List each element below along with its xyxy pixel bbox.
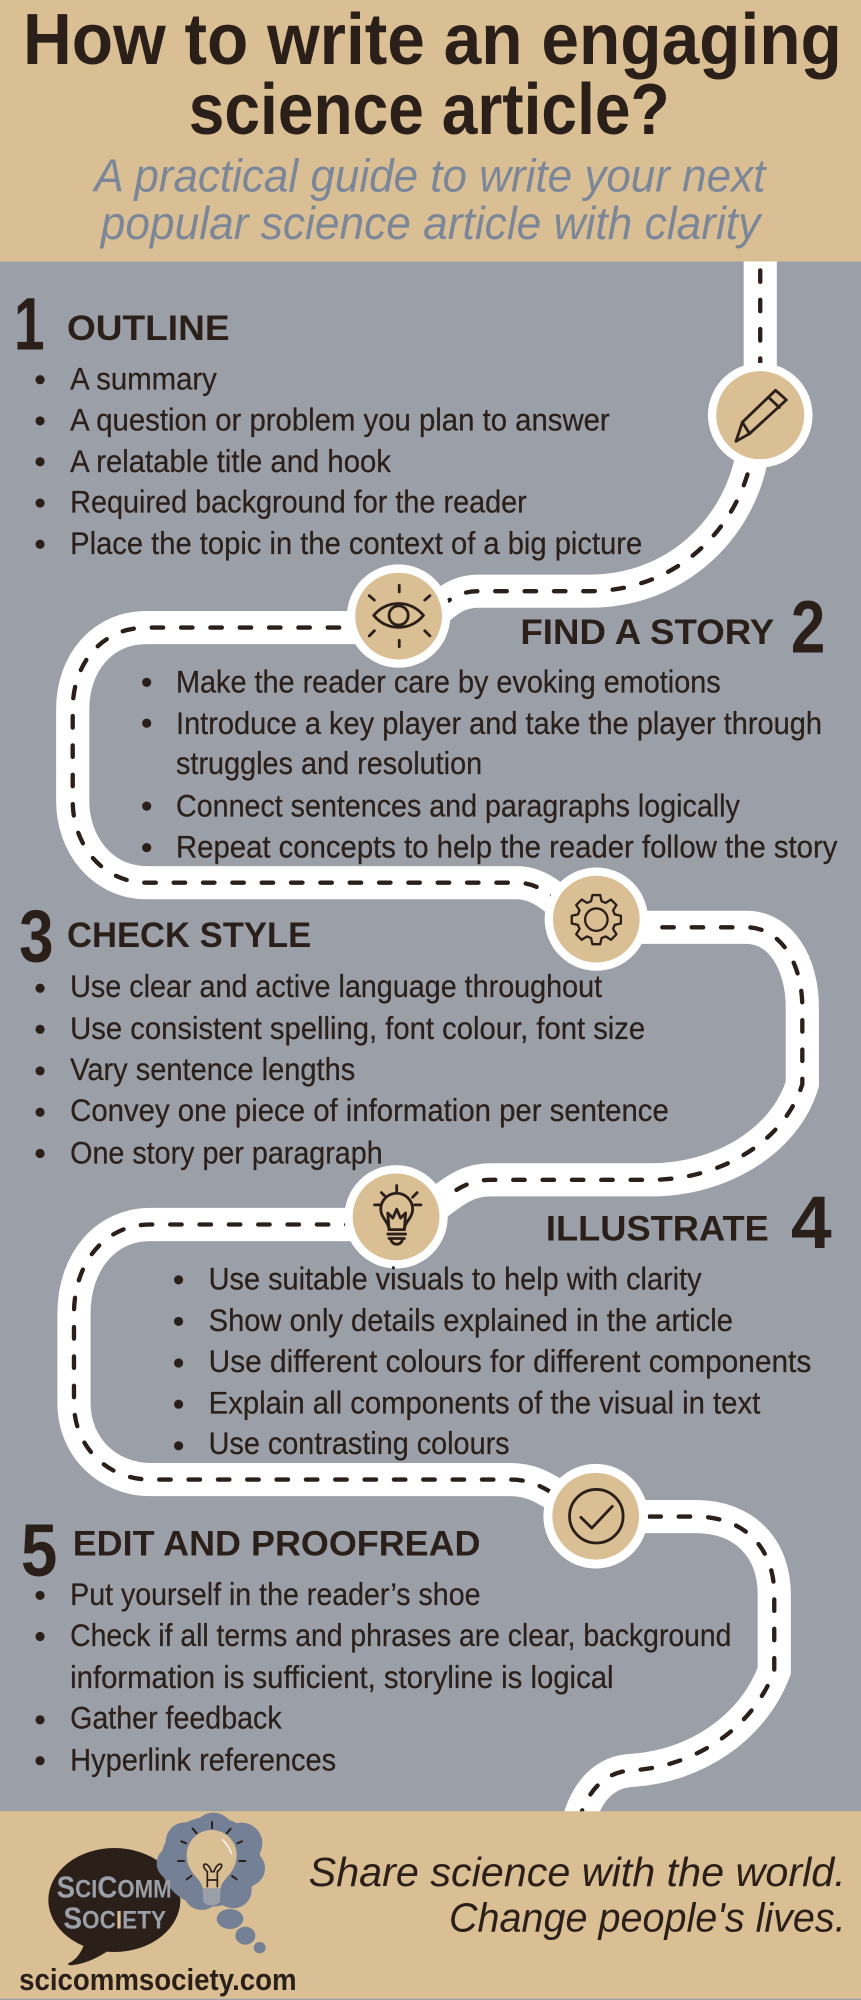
bullet list: outline: A relatable title and hook [70,443,391,479]
bullet list: check style: Convey one piece of information per sentence [70,1092,669,1128]
road with dashed centre line [73,255,802,1824]
bullet list: check style: One story per paragraph [70,1134,383,1170]
subtitle: A practical guide to write your next [92,149,767,201]
bullet list: find a story: Connect sentences and paragraphs logically [176,787,740,823]
bullet list: illustrate [174,1261,811,1461]
title [23,0,842,150]
step number 3: 3 [19,894,54,977]
step number 2: 2 [791,586,825,669]
bullet list: edit and proofread: Gather feedback [70,1700,282,1736]
step number 1: 1 [14,282,45,365]
icon: check mark [570,1489,623,1543]
bullet list: find a story: Make the reader care by evoking emotions [176,663,721,699]
icon: light bulb [375,1186,421,1244]
logo: wordmark: SOCIETY [63,1901,167,1935]
bullet list: edit and proofread: information is sufficient, storyline is logical [70,1659,614,1695]
bullet list: edit and proofread: Put yourself in the reader’s shoe [70,1576,481,1612]
footer panel [0,1811,861,1999]
bullet list: check style: Vary sentence lengths [70,1051,355,1087]
bullet list: illustrate: Explain all components of the visual in text [209,1384,760,1420]
node: gear [545,867,648,971]
icon: pencil [736,390,786,441]
step number 5: 5 [21,1509,57,1592]
bullet list: find a story [142,663,837,865]
logo: light bulb [178,1822,245,1905]
tagline: Share science with the world. [309,1849,846,1895]
panel: step 3 check style [19,894,669,1170]
logo: thought cloud [157,1813,266,1953]
heading: edit and proofread: EDIT AND PROOFREAD [73,1524,481,1563]
heading: find a story: FIND A STORY [520,613,774,652]
bullet list: outline: A question or problem you plan to answer [70,401,610,437]
step number 4: 4 [791,1181,832,1264]
panel: step 5 edit and proofread [21,1509,731,1777]
heading: outline: OUTLINE [67,309,230,348]
node: light bulb [344,1165,448,1268]
node: pencil [708,363,813,467]
tagline: Change people's lives. [449,1895,846,1941]
website address: scicommsociety.com [19,1963,297,1997]
subtitle: popular science article with clarity [99,197,763,249]
tagline [309,1849,846,1941]
panel: step 2 find a story [142,586,837,865]
bullet list: illustrate: Use suitable visuals to help with clarity [209,1261,702,1297]
logo: speech bubble [48,1848,180,1965]
title: science article? [189,69,670,150]
bullet list: outline: A summary [70,361,217,397]
bullet list: check style: Use clear and active language throughout [70,968,602,1004]
subtitle [92,149,767,249]
icon: gear [572,895,621,944]
bullet list: edit and proofread: Check if all terms and phrases are clear, background [70,1617,731,1653]
bullet list: check style [35,968,669,1170]
bullet list: outline: Required background for the reader [70,484,527,520]
bullet list: illustrate: Use different colours for different components [209,1343,811,1379]
logo: wordmark [57,1871,172,1935]
icon: eye [369,585,430,647]
logo [48,1813,266,1965]
bullet list: edit and proofread: Hyperlink references [70,1741,336,1777]
header panel [0,0,861,261]
heading: check style: CHECK STYLE [67,916,311,955]
bullet list: edit and proofread [35,1576,731,1777]
bullet list: outline: Place the topic in the context of a big picture [70,525,642,561]
node: check mark [543,1464,648,1568]
panel: step 1 outline [14,282,642,561]
bullet list: illustrate: Show only details explained in the article [209,1302,733,1338]
node: eye [347,564,450,668]
panel: step 4 illustrate [174,1181,832,1461]
bullet list: outline [35,361,642,561]
logo: wordmark: SCICOMM [57,1871,172,1905]
bullet list: check style: Use consistent spelling, font colour, font size [70,1010,645,1046]
bullet list: illustrate: Use contrasting colours [209,1425,510,1461]
heading: illustrate: ILLUSTRATE [546,1210,769,1249]
bullet list: find a story: struggles and resolution [176,745,482,781]
